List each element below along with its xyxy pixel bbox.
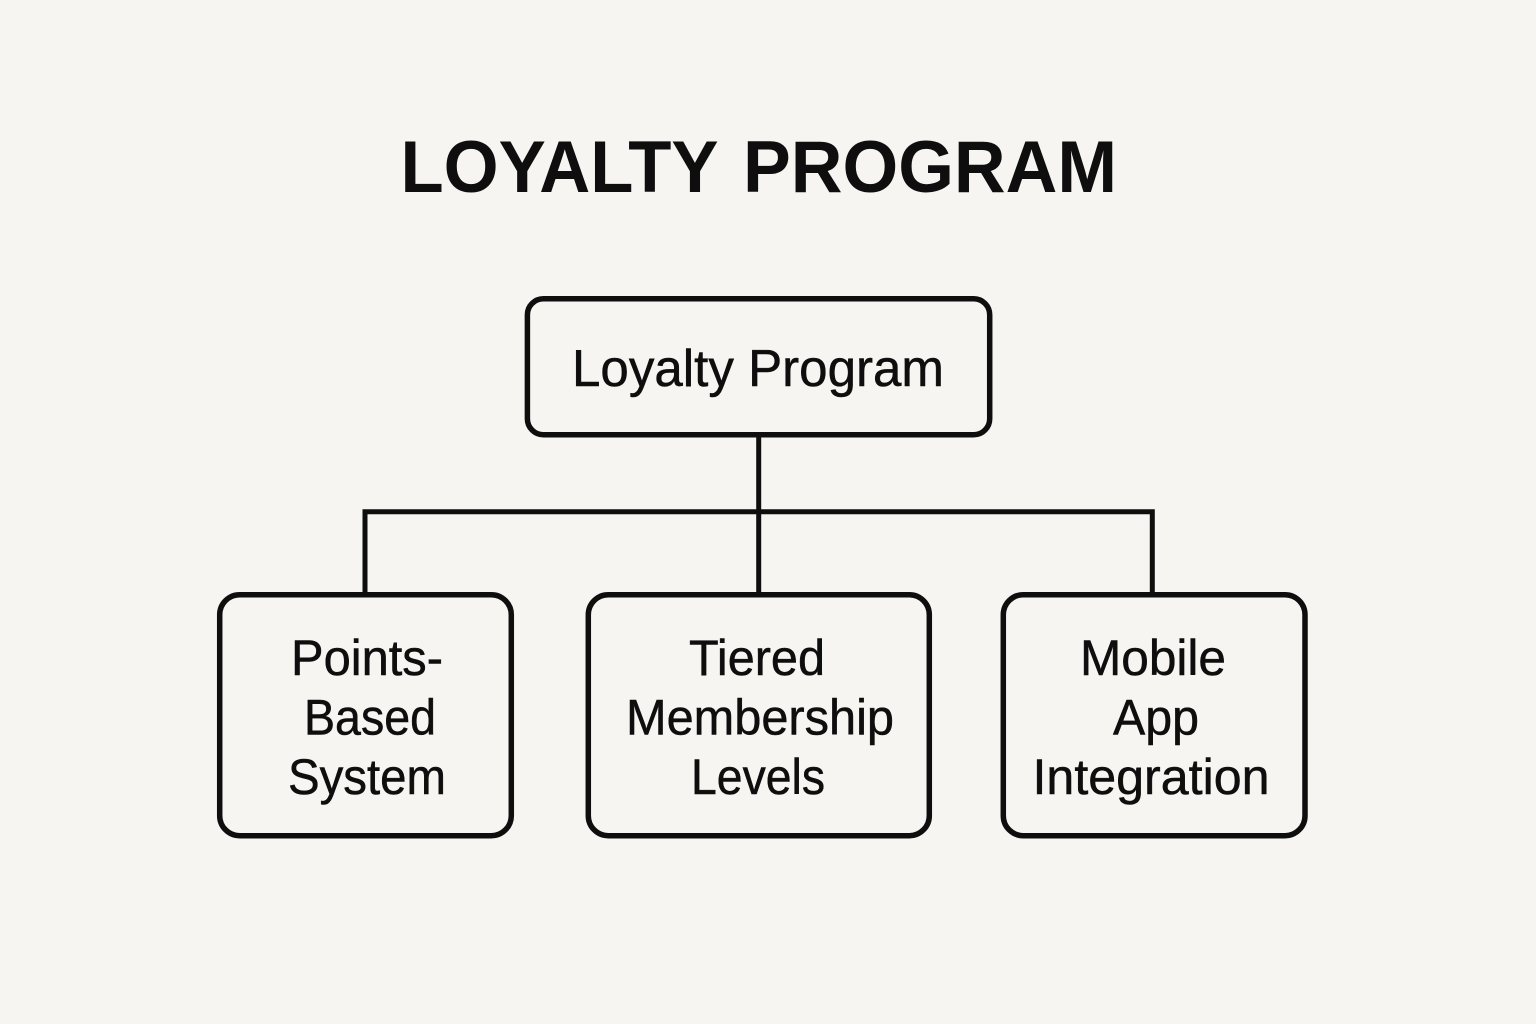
root box: Loyalty Program: Loyalty Program [572,340,944,398]
box: Points-Based System: Points- [291,630,443,686]
box: Mobile App Integration: Integration [1032,749,1270,805]
box: Points-Based System [220,595,511,836]
box: Points-Based System: System [288,749,446,805]
title: LOYALTY [400,127,718,208]
box: Tiered Membership Levels [588,595,929,836]
title: PROGRAM [743,127,1117,208]
box: Points-Based System: Based [304,690,436,746]
connector lines [365,436,1152,594]
root box: Loyalty Program [527,299,990,435]
box: Tiered Membership Levels: Membership [626,690,894,746]
box: Tiered Membership Levels: Levels [691,749,825,805]
box: Mobile App Integration [1003,595,1305,836]
title [400,127,1117,208]
box: Tiered Membership Levels: Tiered [689,630,825,686]
box: Mobile App Integration: Mobile [1080,630,1226,686]
box: Mobile App Integration: App [1113,690,1199,746]
